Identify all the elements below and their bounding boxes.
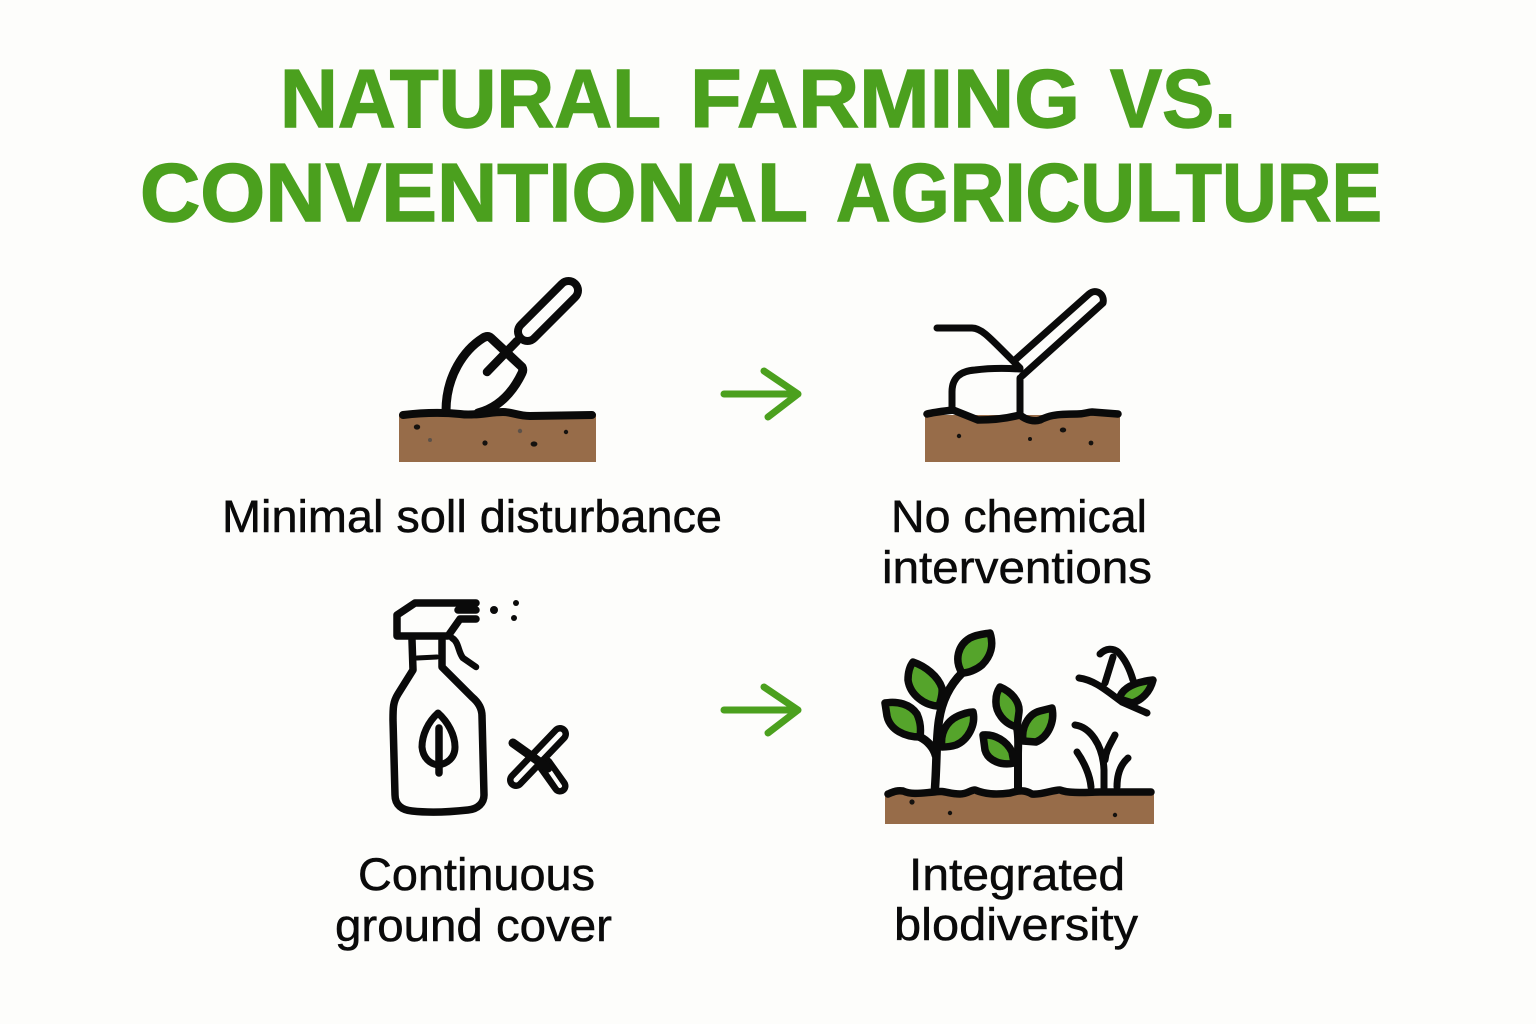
panel: continuous ground cover xyxy=(335,600,612,951)
label: minimal soil disturbance: Minimal soll disturbance xyxy=(222,491,722,542)
label: continuous ground cover: ground cover xyxy=(335,900,612,951)
icon: plants, grass and butterfly xyxy=(885,633,1154,824)
label: integrated biodiversity: blodiversity xyxy=(894,899,1139,950)
arrow: top xyxy=(724,371,798,417)
label: no chemical interventions: No chemical xyxy=(891,491,1147,542)
title: VS. xyxy=(1110,52,1236,145)
label: continuous ground cover: Continuous xyxy=(358,849,595,900)
title: AGRICULTURE xyxy=(836,146,1382,239)
label: continuous ground cover xyxy=(335,849,612,951)
icon: trowel in soil xyxy=(399,290,596,462)
icon: spray bottle with cross xyxy=(393,600,560,812)
arrow: bottom xyxy=(724,687,798,733)
title: NATURAL xyxy=(280,52,661,145)
label: integrated biodiversity xyxy=(894,849,1139,950)
title: CONVENTIONAL xyxy=(140,146,808,239)
panel: integrated biodiversity xyxy=(885,633,1154,950)
label: no chemical interventions: interventions xyxy=(882,542,1152,593)
label: no chemical interventions xyxy=(882,491,1152,593)
title xyxy=(140,52,1382,239)
title: FARMING xyxy=(690,52,1080,145)
panel: no chemical interventions xyxy=(882,292,1152,593)
panel: minimal soil disturbance xyxy=(222,290,722,542)
icon: hoe in soil xyxy=(925,292,1120,462)
label: integrated biodiversity: Integrated xyxy=(909,849,1125,900)
